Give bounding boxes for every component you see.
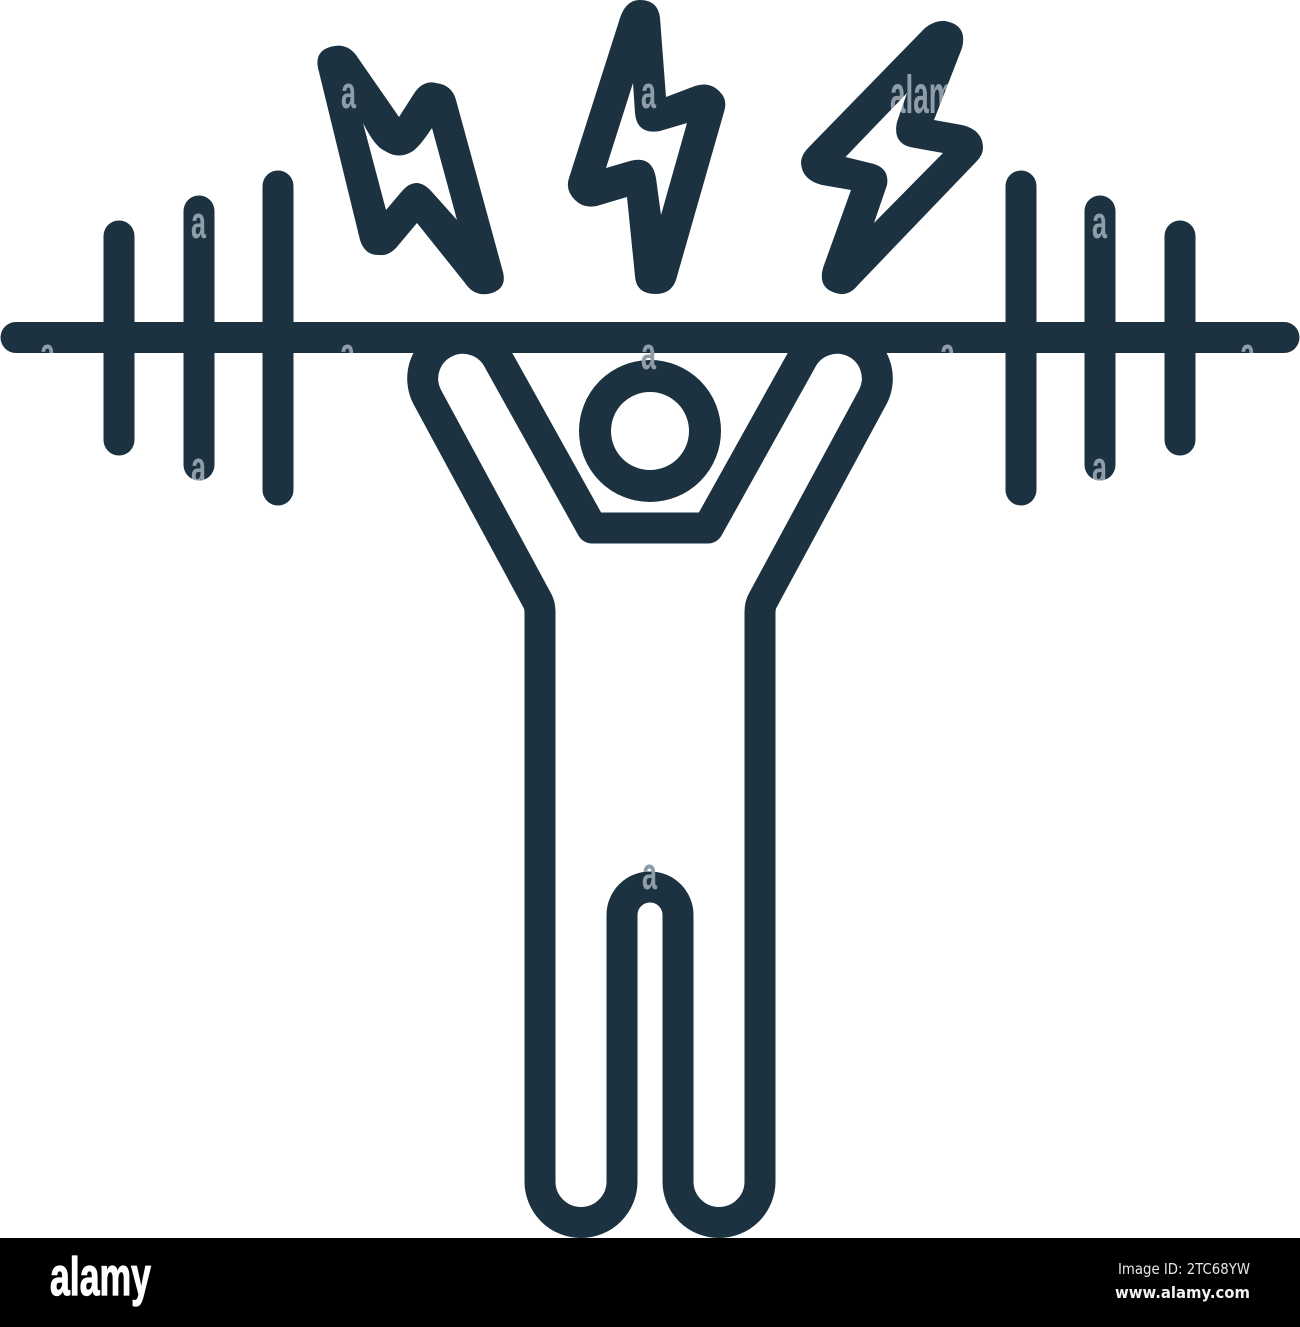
- left lightning bolt: [317, 46, 504, 294]
- watermark letters: a: [641, 328, 656, 379]
- watermark letters: a: [191, 442, 206, 493]
- watermark letters: a: [40, 328, 55, 379]
- right weight plates: [1021, 186, 1180, 490]
- icon: human figure: [423, 338, 877, 1222]
- right lightning bolt: [801, 21, 983, 294]
- footer bar: [0, 1238, 1300, 1327]
- watermark letters: a: [1092, 197, 1107, 248]
- watermark letters: a: [940, 328, 955, 379]
- watermark letters: a: [340, 328, 355, 379]
- barbell bar: [16, 322, 1284, 353]
- watermark letters: a: [642, 848, 657, 899]
- watermark letters: a: [1240, 328, 1255, 379]
- watermark letters: a: [191, 197, 206, 248]
- icon: barbell: [16, 186, 1284, 490]
- watermark letters: a: [341, 67, 356, 118]
- body outline: [423, 338, 877, 1222]
- footer image id: Image ID: 2TC68YW: [1118, 1260, 1250, 1278]
- watermark letters: [40, 65, 1255, 899]
- watermark letters: a: [1092, 442, 1107, 493]
- footer website: www.alamy.com: [1115, 1283, 1250, 1302]
- watermark letters: a: [641, 67, 656, 118]
- left weight plates: [119, 186, 278, 490]
- footer logo: alamy: alamy: [50, 1247, 151, 1307]
- icon: lightning bolts: [317, 0, 983, 294]
- head: [595, 376, 705, 486]
- middle lightning bolt: [568, 0, 725, 294]
- watermark letters: alam: [890, 65, 954, 126]
